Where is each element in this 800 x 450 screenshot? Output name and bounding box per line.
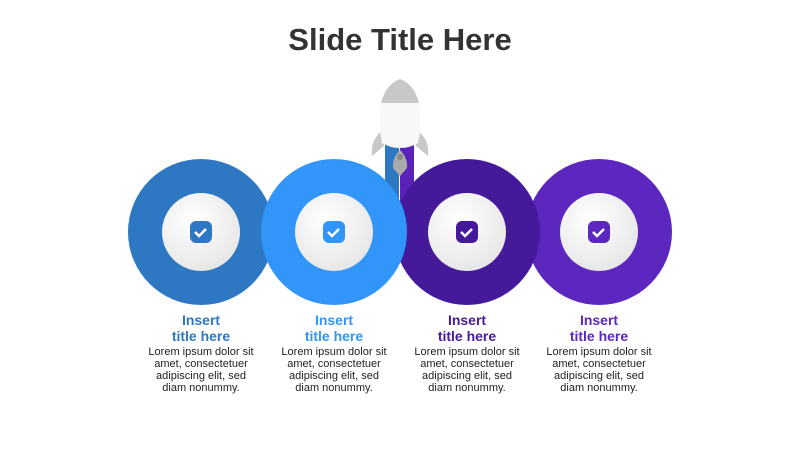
text 1: Lorem ipsum dolor sit	[148, 346, 254, 358]
text 2: title here	[305, 328, 363, 344]
text 2: adipiscing elit, sed	[289, 370, 379, 382]
text 4: diam nonummy.	[560, 382, 638, 394]
text 4: adipiscing elit, sed	[554, 370, 644, 382]
circle 1	[128, 159, 274, 305]
text 1: amet, consectetuer	[154, 358, 248, 370]
text 4	[546, 312, 652, 394]
text 4: Lorem ipsum dolor sit	[546, 346, 652, 358]
text 3: diam nonummy.	[428, 382, 506, 394]
text 2	[281, 312, 387, 394]
text 1: adipiscing elit, sed	[156, 370, 246, 382]
text 1	[148, 312, 254, 394]
text 3: amet, consectetuer	[420, 358, 514, 370]
text 2: amet, consectetuer	[287, 358, 381, 370]
text 2: diam nonummy.	[295, 382, 373, 394]
text 3: Insert	[448, 312, 486, 328]
circle 4	[526, 159, 672, 305]
text 4: title here	[570, 328, 628, 344]
text 1: Insert	[182, 312, 220, 328]
text 3: Lorem ipsum dolor sit	[414, 346, 520, 358]
text 2: Lorem ipsum dolor sit	[281, 346, 387, 358]
text 3: title here	[438, 328, 496, 344]
text 2: Insert	[315, 312, 353, 328]
title: Slide Title Here	[288, 22, 512, 57]
text 3: adipiscing elit, sed	[422, 370, 512, 382]
text 1: title here	[172, 328, 230, 344]
text 1: diam nonummy.	[162, 382, 240, 394]
text 3	[414, 312, 520, 394]
rocket	[372, 79, 428, 210]
text 4: Insert	[580, 312, 618, 328]
text 4: amet, consectetuer	[552, 358, 646, 370]
circle 2	[261, 159, 407, 305]
circle 3	[394, 159, 540, 305]
